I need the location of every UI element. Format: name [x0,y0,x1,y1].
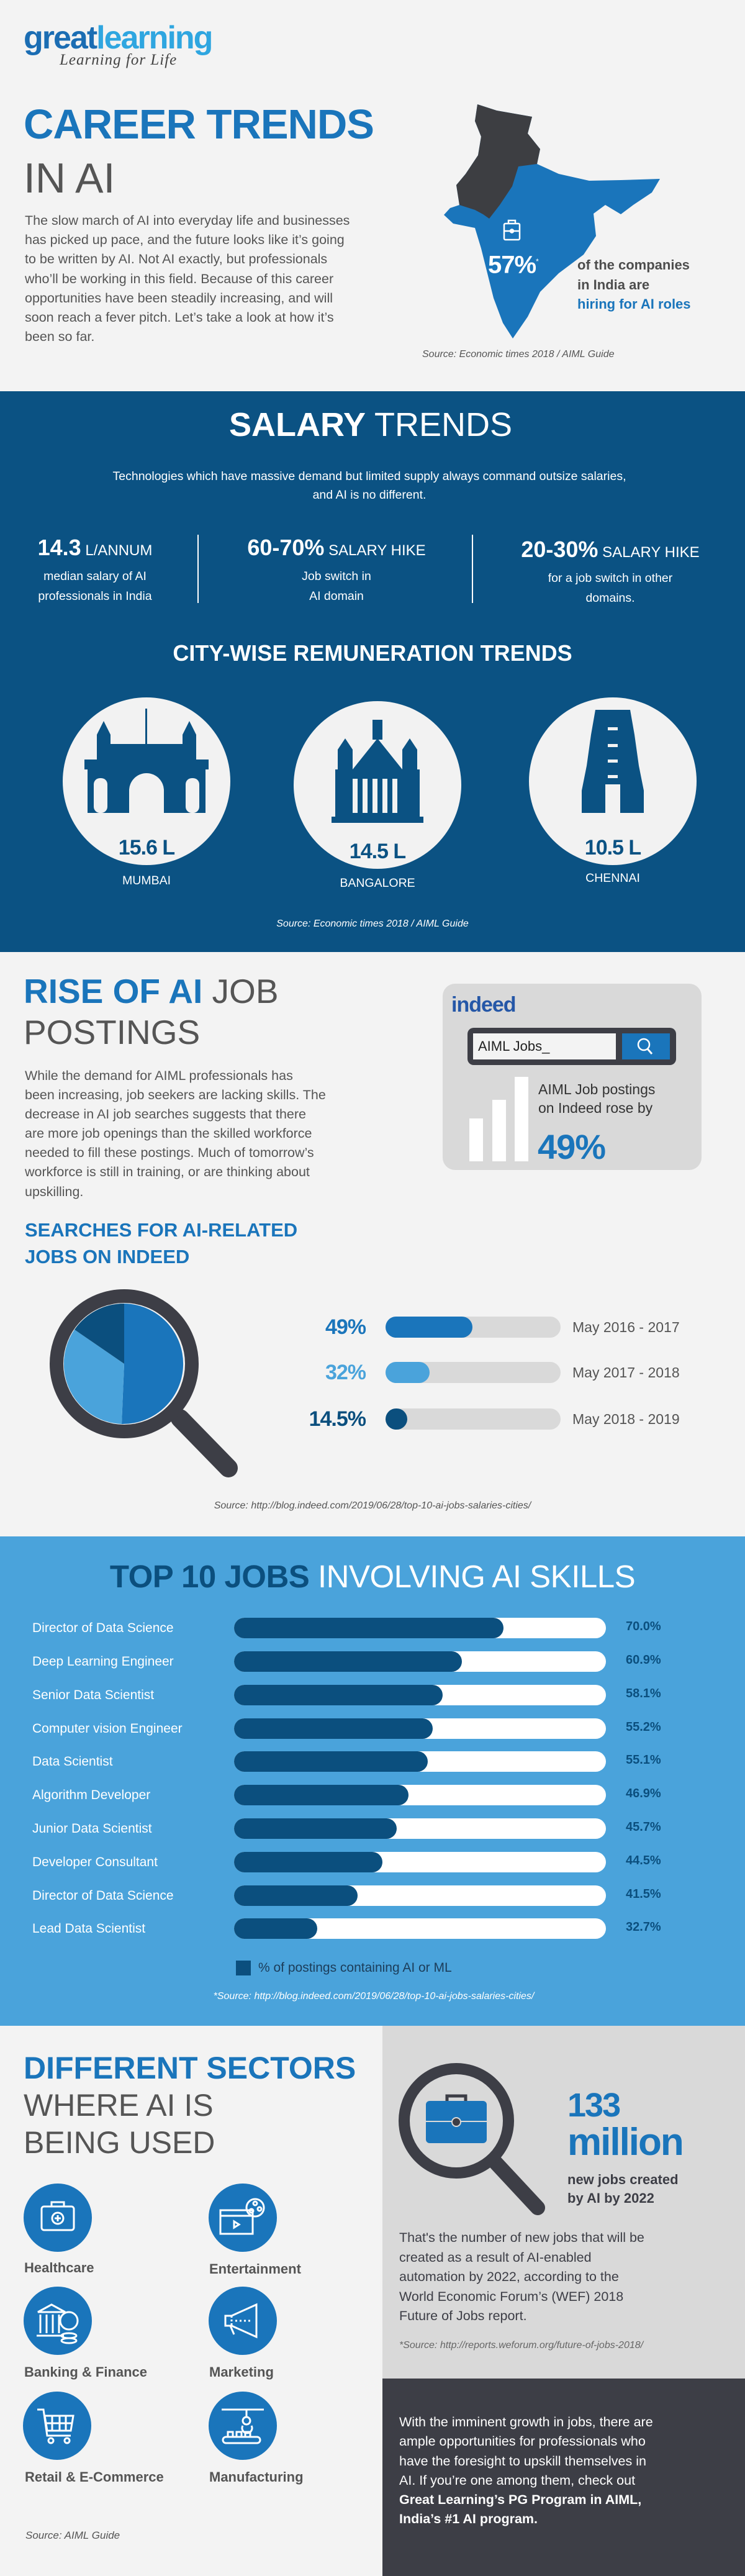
stat: 133 million: million [567,2121,683,2164]
stat: 57%: 57%* [488,251,538,278]
city: Mumbai: 15.6 L [119,836,174,859]
intro text: The slow march of AI into everyday life and businesses [25,213,350,228]
stat: AI hike: AI domain [309,589,364,603]
text block: created as a result of AI-enabled [399,2249,592,2264]
heading [24,2051,356,2160]
text block: been increasing, job seekers are lacking skills. The [25,1087,326,1102]
city: Mumbai: MUMBAI [122,874,171,887]
intro text: who’ll be working in this field. Because of this career [25,271,333,286]
subheading: JOBS ON INDEED [25,1246,189,1268]
bar chart: searches: May 2018 - 2019 [572,1411,680,1427]
text block [25,1068,326,1199]
bar chart: searches: 32% [325,1361,366,1384]
map of India [444,104,660,338]
text block: workforce is still in training, or are thinking about [25,1164,310,1179]
source: Source: AIML Guide [25,2529,120,2541]
bar chart: jobs: Developer Consultant [32,1855,158,1869]
bar chart: jobs: 60.9% [626,1653,661,1667]
section: sectors [0,2026,382,2576]
logo: greatlearning [24,20,212,56]
stat: 133 million: 133 [567,2087,620,2124]
subheading: SEARCHES FOR AI-RELATED [25,1219,297,1241]
callout text: of the companies [577,257,690,273]
city: Mumbai [63,697,230,887]
city: Chennai [529,697,697,885]
panel: call to action: India’s #1 AI program. [399,2511,538,2526]
bar chart: jobs: 41.5% [626,1887,661,1901]
heading: DIFFERENT SECTORS [24,2051,356,2085]
bar chart: jobs: Director of Data Science [32,1889,174,1903]
sector: marketing [209,2287,277,2380]
city: Chennai: 10.5 L [585,836,641,859]
card: indeed: 49% [538,1127,605,1166]
bar chart: jobs: Computer vision Engineer [32,1721,183,1736]
card: indeed [443,984,702,1170]
panel: call to action: ample opportunities for professionals who [399,2434,646,2449]
bar chart: searches: May 2017 - 2018 [572,1364,680,1381]
sector: banking [24,2287,147,2380]
callout text [577,257,691,312]
text block: That's the number of new jobs that will be [399,2230,644,2245]
stat: median salary: median salary of AI [43,569,147,583]
city: Chennai: CHENNAI [585,871,640,885]
icon: briefcase [504,220,520,240]
stat: 133 million [567,2087,683,2164]
text block [399,2230,644,2323]
panel: call to action: With the imminent growth in jobs, there are [399,2415,653,2429]
stat: other hike: 20-30% SALARY HIKE [521,537,700,562]
bar chart: jobs: 45.7% [626,1820,661,1834]
bar chart: jobs: Director of Data Science [32,1621,174,1635]
bar chart: jobs: Lead Data Scientist [32,1921,145,1936]
indeed logo: indeed [451,993,516,1017]
search box [467,1028,676,1065]
callout text: hiring for AI roles [577,296,691,312]
bar chart: jobs: 58.1% [626,1687,661,1700]
legend: % of postings containing AI or ML [258,1961,452,1975]
source: *Source: http://blog.indeed.com/2019/06/28/top-10-ai-jobs-salaries-cities/ [214,1991,534,2002]
city: Bangalore: BANGALORE [340,876,415,890]
panel: call to action: AI. If you’re one among them, check out [399,2473,635,2488]
text block: automation by 2022, according to the [399,2269,619,2284]
panel: 133 million [382,2026,745,2379]
sector: retail: Retail & E-Commerce [25,2469,164,2485]
sector: entertainment: Entertainment [209,2261,301,2277]
stat: AI hike: Job switch in [302,569,371,583]
sector: manufacturing [209,2392,304,2485]
heading: RISE OF AI JOB [24,972,279,1010]
section: salary trends [0,391,745,952]
subtitle: and AI is no different. [313,488,426,502]
subtitle: Technologies which have massive demand but limited supply always command outsize salaries, [113,469,626,483]
title: CAREER TRENDS [24,101,374,148]
stat: other hike [521,537,700,605]
heading: BEING USED [24,2125,215,2160]
intro text: has picked up pace, and the future looks like it’s going [25,232,345,247]
title [24,101,374,202]
text: on Indeed rose by [538,1100,652,1116]
bar icon [469,1077,528,1161]
city: Bangalore: 14.5 L [350,840,405,863]
section: header [0,0,745,391]
sector: banking: Banking & Finance [24,2364,147,2380]
stat: median salary [38,535,152,603]
bar chart: searches: May 2016 - 2017 [572,1319,680,1335]
intro text: opportunities have been steadily increasing, and will [25,291,333,306]
intro text: to be written by AI. Not AI exactly, but professionals [25,252,327,266]
bar chart: jobs: 44.5% [626,1854,661,1867]
search box: AIML Jobs_ [478,1038,549,1054]
text block: World Economic Forum’s (WEF) 2018 [399,2289,623,2304]
bar chart: jobs: 46.9% [626,1787,661,1800]
bar chart: jobs: 32.7% [626,1920,661,1934]
source: *Source: http://reports.weforum.org/future-of-jobs-2018/ [399,2340,643,2351]
stat: other hike: domains. [585,591,635,605]
section: rise of AI job postings [0,952,745,1536]
bar chart: jobs: Senior Data Scientist [32,1688,154,1702]
sector: healthcare [24,2184,94,2275]
panel: call to action: Great Learning’s PG Program in AIML, [399,2492,641,2507]
text block: are more job openings than the skilled workforce [25,1126,312,1141]
heading: WHERE AI IS [24,2088,214,2123]
text: AIML Job postings [538,1081,655,1097]
sector: entertainment [209,2184,301,2277]
bar chart: searches: 14.5% [309,1407,366,1431]
stat caption: new jobs created [567,2172,679,2187]
sector: healthcare: Healthcare [24,2260,94,2275]
text [538,1081,655,1116]
heading: POSTINGS [24,1013,200,1051]
text block: upskilling. [25,1184,83,1199]
stat caption [567,2172,679,2206]
intro text [25,213,350,344]
icon: magnifier with briefcase [399,2063,545,2215]
intro text: soon reach a fever pitch. Let’s take a look at how it’s [25,310,334,325]
bar chart: jobs: Algorithm Developer [32,1788,150,1802]
heading [24,972,279,1051]
stat: AI hike: 60-70% SALARY HIKE [247,535,426,560]
text block: While the demand for AIML professionals has [25,1068,293,1083]
stat: median salary: professionals in India [38,589,152,603]
source: Source: Economic times 2018 / AIML Guide [422,349,614,360]
bar chart: jobs: 55.1% [626,1753,661,1767]
title: IN AI [24,155,115,202]
bar chart: jobs: Deep Learning Engineer [32,1654,174,1669]
sector: manufacturing: Manufacturing [209,2469,304,2485]
bar chart: jobs [32,1618,661,1939]
sector: retail [23,2392,164,2485]
callout text: in India are [577,277,649,292]
bar chart: jobs: 70.0% [626,1620,661,1633]
sector: marketing: Marketing [209,2364,274,2380]
heading: TOP 10 JOBS INVOLVING AI SKILLS [110,1559,635,1594]
subtitle [113,469,626,502]
icon: magnifier pie [50,1289,238,1477]
text block: needed to fill these postings. Much of tomorrow’s [25,1145,314,1160]
section: top 10 jobs [0,1536,745,2026]
bar chart: jobs: 55.2% [626,1720,661,1734]
bar chart: searches: 49% [325,1315,366,1339]
source: Source: http://blog.indeed.com/2019/06/28/top-10-ai-jobs-salaries-cities/ [214,1500,531,1511]
bar chart: jobs: Data Scientist [32,1754,113,1769]
text block: Future of Jobs report. [399,2308,527,2323]
panel: call to action [382,2379,745,2576]
bar chart: searches [309,1315,680,1431]
stat caption: by AI by 2022 [567,2190,654,2206]
panel: call to action: have the foresight to upskill themselves in [399,2454,646,2469]
city: Bangalore [294,701,461,890]
intro text: been so far. [25,329,94,344]
text block: decrease in AI job searches suggests that there [25,1107,306,1122]
logo: Learning for Life [60,52,177,68]
source: Source: Economic times 2018 / AIML Guide [276,918,469,929]
stat: AI hike [247,535,426,603]
bar chart: jobs: Junior Data Scientist [32,1821,152,1836]
stat: other hike: for a job switch in other [548,571,672,585]
heading: city-wise: CITY-WISE REMUNERATION TRENDS [173,640,572,666]
subheading [25,1219,297,1268]
heading: SALARY TRENDS [229,406,512,443]
stat: median salary: 14.3 L/ANNUM [38,535,152,560]
